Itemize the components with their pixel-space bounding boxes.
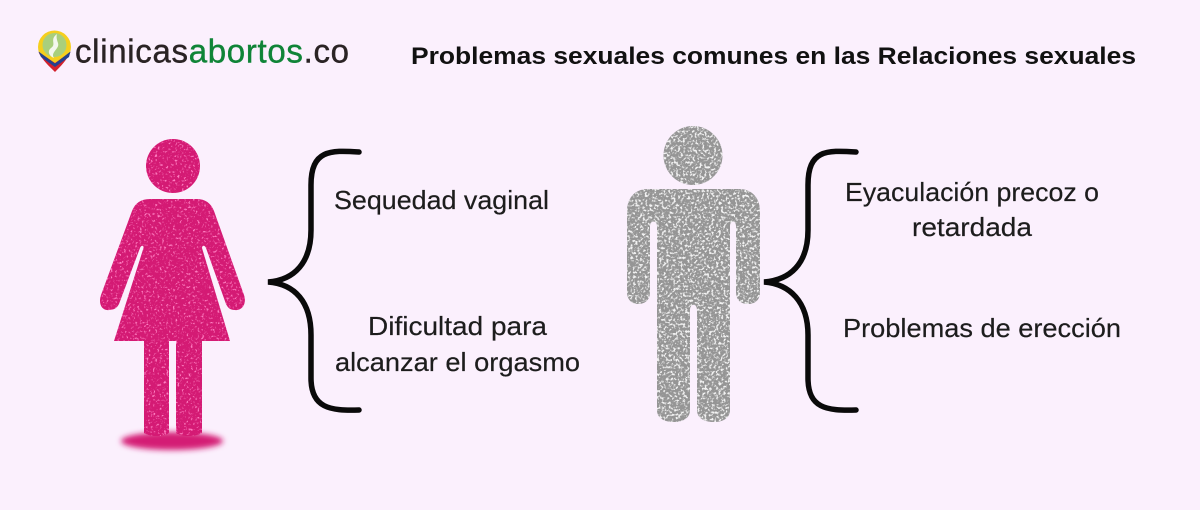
text: Dificultad para alcanzar el orgasmo: alcanzar el orgasmo xyxy=(335,347,580,377)
panel: men xyxy=(627,126,1121,422)
logo xyxy=(38,30,349,72)
text: Eyaculación precoz o retardada: retardada xyxy=(912,212,1033,242)
icon: grey glitter man figure xyxy=(627,126,760,422)
text: Eyaculación precoz o retardada xyxy=(845,177,1099,242)
icon: location pin with Colombian colours xyxy=(38,30,71,72)
text: Sequedad vaginal: Sequedad vaginal xyxy=(334,185,549,215)
brace xyxy=(764,151,856,410)
text: Eyaculación precoz o retardada: Eyaculación precoz o xyxy=(845,177,1099,207)
text: Dificultad para alcanzar el orgasmo: Dificultad para xyxy=(368,311,548,341)
brace xyxy=(268,151,359,410)
icon: pink glitter woman figure xyxy=(100,139,245,450)
text: Problemas de erección: Problemas de erección xyxy=(843,313,1121,343)
logo text: clinicasabortos.co xyxy=(75,32,349,70)
title: Problemas sexuales comunes en las Relaciones sexuales xyxy=(411,43,1136,70)
panel: women xyxy=(100,139,580,450)
text: Dificultad para alcanzar el orgasmo xyxy=(335,311,580,377)
